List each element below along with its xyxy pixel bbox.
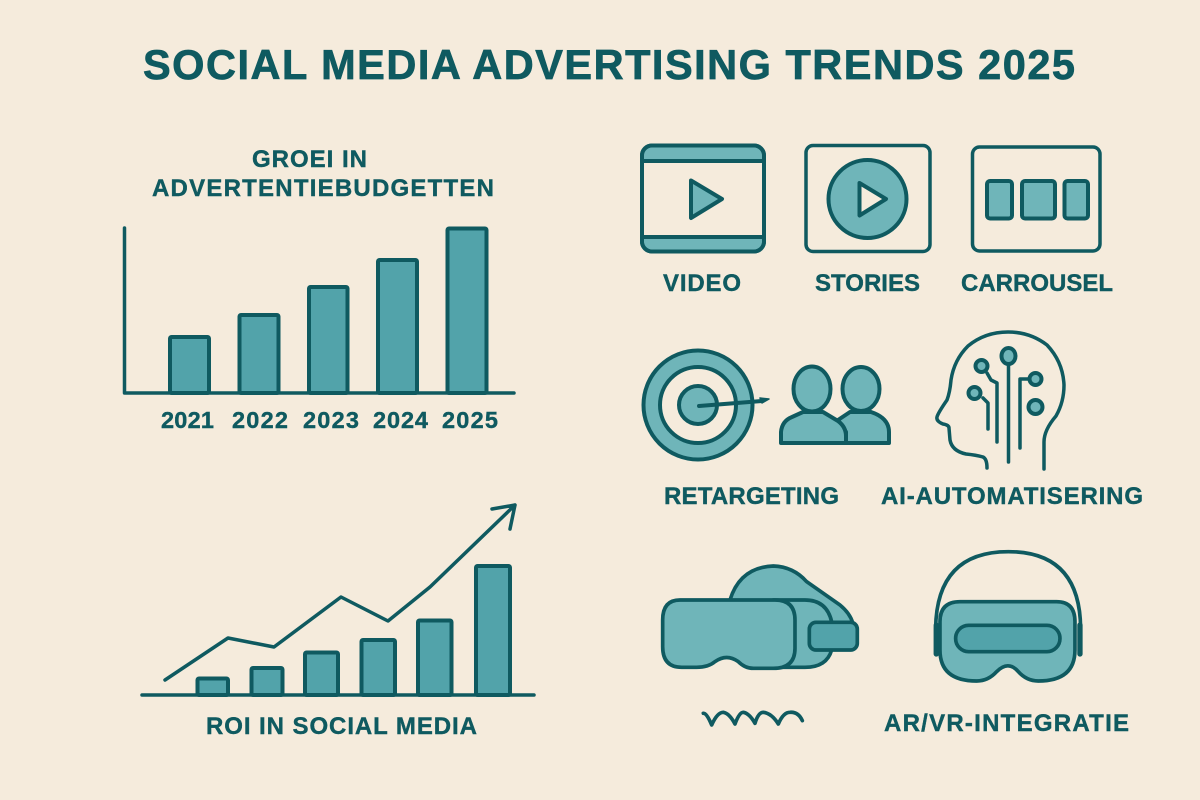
label: AI automation: AI-AUTOMATISERING xyxy=(881,483,1143,510)
icon: carousel xyxy=(972,147,1100,251)
icon: squiggle placeholder label xyxy=(703,712,802,725)
icon: target with arrow xyxy=(644,350,769,460)
year labels xyxy=(161,407,498,433)
baseline xyxy=(142,693,534,697)
heading: budget growth: ADVERTENTIEBUDGETTEN xyxy=(152,175,494,202)
label: retargeting: RETARGETING xyxy=(664,483,839,510)
year labels: 2025 xyxy=(442,407,498,433)
icon: video xyxy=(642,146,764,252)
icon: stories xyxy=(806,146,930,252)
year labels: 2022 xyxy=(232,407,288,433)
label: video: VIDEO xyxy=(663,270,741,297)
year labels: 2024 xyxy=(373,407,428,433)
icon: audience xyxy=(781,366,889,443)
ROI bars xyxy=(198,566,510,695)
bars 2021 to 2025 xyxy=(170,228,486,393)
circuit nodes xyxy=(968,348,1042,414)
label: carousel: CARROUSEL xyxy=(961,270,1113,297)
trend arrow xyxy=(165,505,515,680)
heading: budget growth: GROEI IN xyxy=(252,146,367,173)
ROI label: ROI IN SOCIAL MEDIA xyxy=(206,713,477,740)
title: SOCIAL MEDIA ADVERTISING TRENDS 2025 xyxy=(143,41,1075,88)
label: AR/VR integration: AR/VR-INTEGRATIE xyxy=(884,710,1129,737)
heading: budget growth xyxy=(152,146,494,202)
circuit traces xyxy=(983,360,1029,462)
year labels: 2021 xyxy=(161,407,214,433)
panel: budget growth bar chart xyxy=(124,146,514,433)
head outline xyxy=(937,332,1064,469)
label: stories: STORIES xyxy=(815,270,920,297)
icon: VR headset side view xyxy=(663,566,857,668)
icon: VR headset front view xyxy=(936,552,1081,681)
icon: AI head xyxy=(937,332,1064,469)
panel: ROI chart xyxy=(142,505,534,740)
chart axes xyxy=(124,228,514,393)
year labels: 2023 xyxy=(303,407,359,433)
